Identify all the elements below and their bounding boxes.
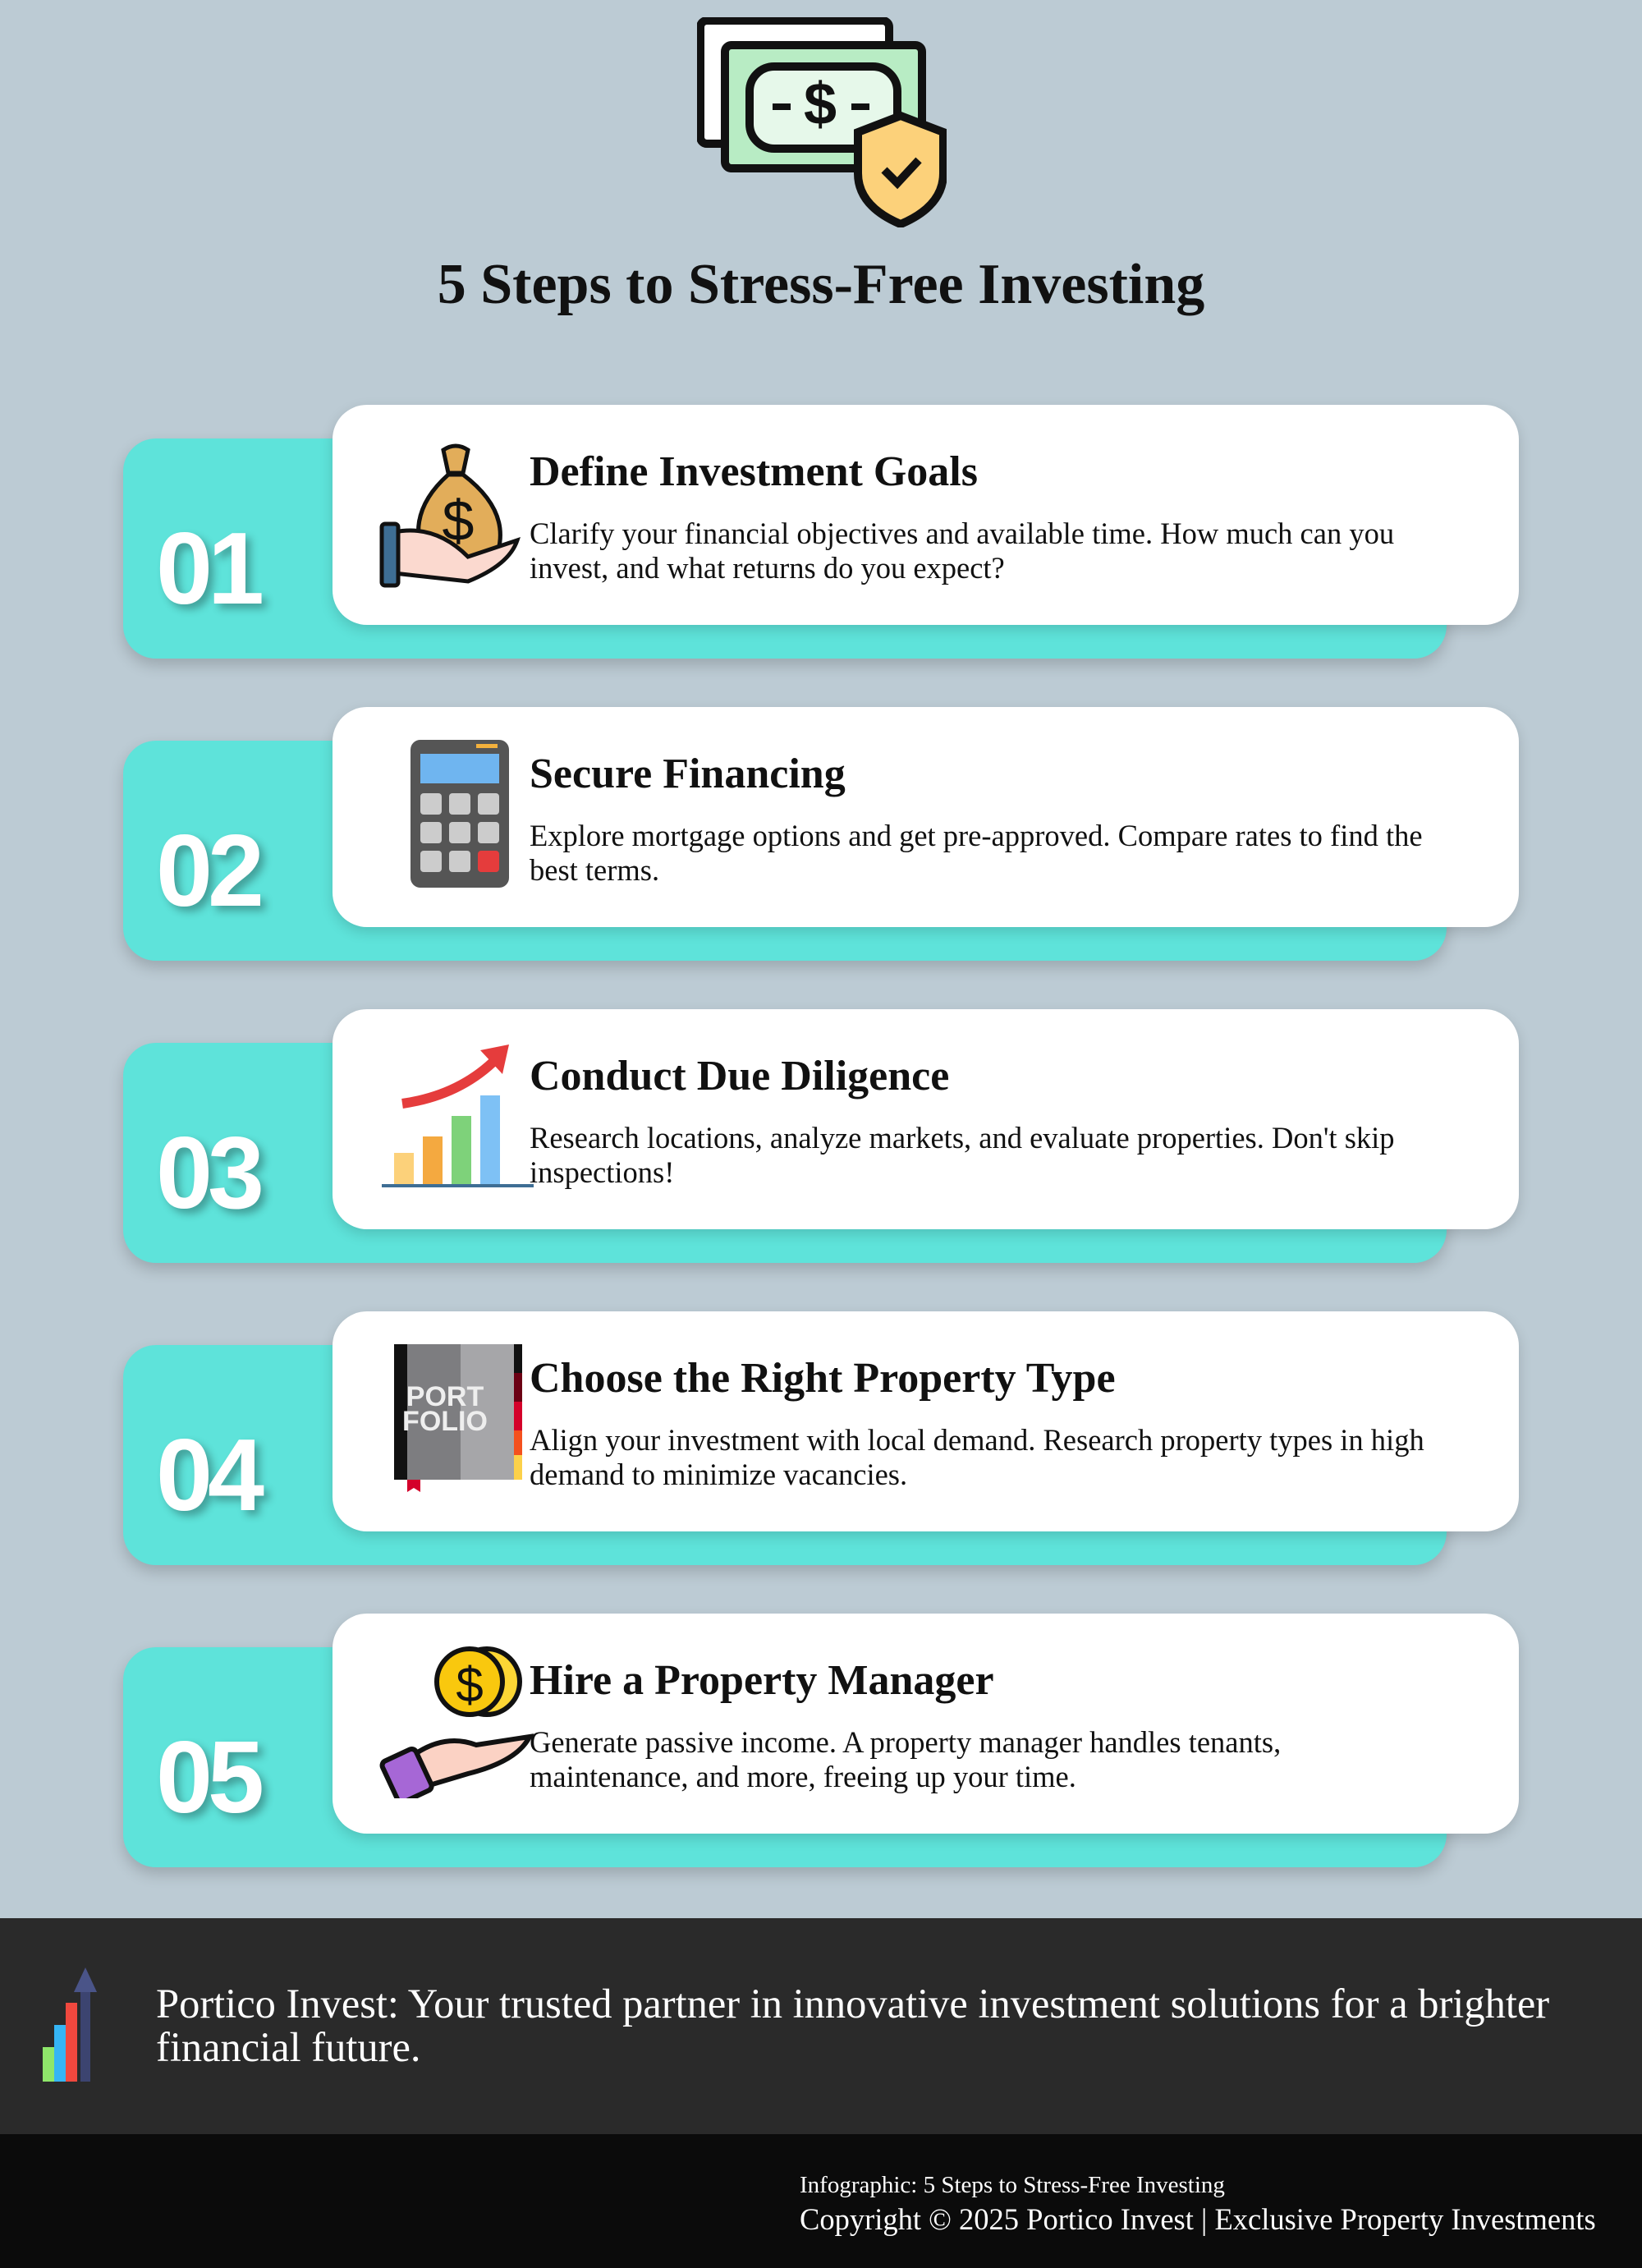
footer: tagline: financial future.	[156, 2024, 420, 2070]
step 02: Secure Financing	[530, 751, 846, 797]
icon: portfolio book	[394, 1344, 522, 1492]
step 04: Choose the Right Property Type	[530, 1355, 1116, 1402]
step 03	[117, 1009, 1523, 1275]
step 03: Research locations, analyze markets, and evaluate properties. Don't skip	[530, 1121, 1395, 1155]
step 02: Explore mortgage options and get pre-approved. Compare rates to find the	[530, 819, 1423, 852]
step 01: invest, and what returns do you expect?	[530, 551, 1005, 585]
icon: coins over hand	[379, 1646, 534, 1798]
step 04: 04	[156, 1419, 259, 1532]
step 01: Clarify your financial objectives and available time. How much can you	[530, 516, 1394, 550]
icon: bar chart arrow	[43, 1967, 97, 2082]
step 04: demand to minimize vacancies.	[530, 1458, 907, 1491]
step 02: 02	[156, 815, 259, 928]
step 03: inspections!	[530, 1155, 674, 1189]
icon: money bag in hand	[379, 443, 521, 588]
step 05: 05	[156, 1721, 259, 1834]
step 05	[117, 1614, 1523, 1880]
step 01	[117, 405, 1523, 671]
step 01: 01	[156, 512, 259, 626]
step 03: Conduct Due Diligence	[530, 1053, 949, 1100]
step 05: maintenance, and more, freeing up your time.	[530, 1760, 1076, 1793]
step 01: Define Investment Goals	[530, 448, 978, 495]
step 02	[117, 707, 1523, 973]
step 05: Hire a Property Manager	[530, 1657, 994, 1704]
icon: money with shield	[697, 17, 947, 227]
footer: copyright	[0, 2134, 1642, 2268]
step 02: best terms.	[530, 853, 659, 887]
footer: tagline	[0, 1918, 1642, 2134]
icon: money with shield: $	[804, 71, 837, 137]
footer: copyright: Copyright © 2025 Portico Invest | Exclusive Property Investments	[800, 2202, 1596, 2236]
icon: portfolio book: PORT	[406, 1381, 484, 1412]
icon: money bag in hand: $	[443, 489, 474, 553]
icon: portfolio book: FOLIO	[402, 1406, 488, 1437]
step 05: Generate passive income. A property manager handles tenants,	[530, 1725, 1281, 1759]
step 03: 03	[156, 1117, 259, 1230]
icon: growth bar chart	[382, 1044, 534, 1187]
footer: copyright: Infographic: 5 Steps to Stress-Free Investing	[800, 2172, 1225, 2198]
title: 5 Steps to Stress-Free Investing	[438, 253, 1204, 316]
icon: coins over hand: $	[456, 1657, 484, 1712]
footer: tagline: Portico Invest: Your trusted partner in innovative investment solutions for a brighter	[156, 1981, 1549, 2027]
step 04	[117, 1311, 1523, 1577]
step 04: Align your investment with local demand. Research property types in high	[530, 1423, 1424, 1457]
icon: calculator	[410, 740, 509, 888]
